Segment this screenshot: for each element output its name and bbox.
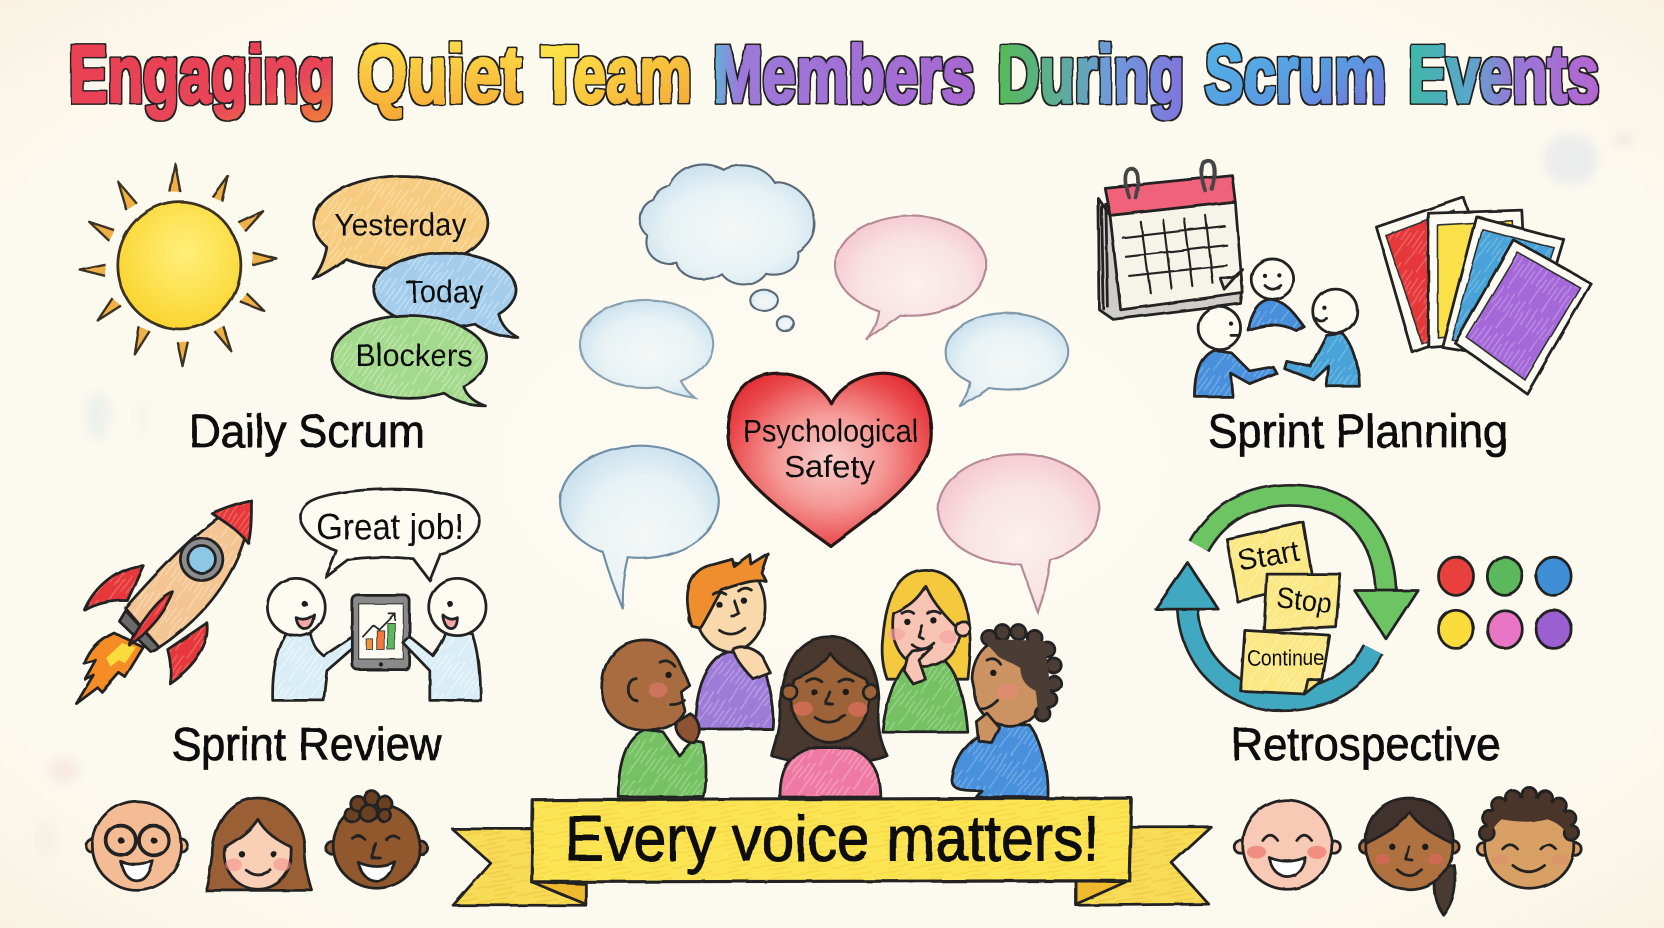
person: centre, long dark hair, pink shirt — [772, 637, 887, 797]
person: orange hair, purple shirt — [687, 554, 773, 729]
panel: daily scrum — [80, 163, 518, 457]
speech bubble: pale pink top — [836, 216, 986, 340]
person: brown skin, green shirt, profile — [602, 640, 706, 797]
title: Scrum — [1204, 30, 1386, 120]
heart: psychological safety: Safety — [784, 449, 876, 485]
figures: three people at table — [1195, 259, 1359, 397]
group of five people — [602, 554, 1061, 797]
speech bubble: today: Today — [405, 273, 484, 309]
thought cloud — [640, 164, 814, 331]
figure: right person — [403, 578, 486, 700]
speech bubble: today — [374, 253, 518, 337]
sticky note: continue: Continue — [1247, 645, 1324, 670]
icon: calendar — [1098, 160, 1243, 319]
title: Engaging — [69, 30, 334, 120]
sticky note: start — [1227, 522, 1312, 602]
face: dark skin with curly top — [326, 791, 428, 888]
title — [69, 30, 1599, 120]
panel: retrospective — [1156, 495, 1571, 770]
title: During — [998, 30, 1184, 120]
sticky note: continue — [1241, 630, 1330, 694]
person: curly hair, blue shirt, profile — [952, 625, 1061, 797]
colour dots — [1438, 557, 1571, 648]
title: Quiet — [358, 30, 522, 120]
speech bubble: great job: Great job! — [316, 506, 464, 547]
figure: left person — [267, 578, 359, 700]
sticky note: stop — [1264, 574, 1340, 630]
speech bubble: blockers: Blockers — [356, 337, 472, 373]
panel: psychological safety speech bubbles — [560, 164, 1099, 612]
speech bubble: large blue left — [560, 446, 719, 609]
sticky note: stop: Stop — [1275, 582, 1334, 621]
banner: every voice matters — [452, 798, 1211, 905]
speech bubble: large pink right — [938, 454, 1099, 612]
faces: right row — [1234, 787, 1581, 915]
icon: green cycle arrow — [1199, 495, 1418, 639]
label: sprint review: Sprint Review — [172, 718, 442, 770]
right tail — [1076, 827, 1211, 905]
title: Members — [713, 30, 974, 120]
left tail — [452, 829, 586, 905]
icon: rocket — [76, 501, 252, 704]
heart: psychological safety: Psychological — [743, 412, 918, 448]
panel: sprint planning — [1098, 160, 1591, 457]
face: curly hair, smiling — [1477, 787, 1581, 888]
speech bubble: great job — [301, 489, 479, 580]
title: Team — [541, 30, 692, 120]
banner body — [532, 798, 1131, 882]
speech bubble: pale blue left — [579, 300, 713, 398]
panel: sprint review — [76, 489, 486, 770]
icon: sun — [80, 163, 277, 366]
heart: psychological safety — [728, 373, 932, 547]
face: bald, laughing — [1234, 800, 1340, 889]
speech bubble: pale blue right — [945, 313, 1068, 406]
face: long brown hair — [206, 798, 312, 890]
label: sprint planning: Sprint Planning — [1208, 405, 1508, 457]
speech bubble: yesterday: Yesterday — [334, 207, 467, 243]
sticky note: start: Start — [1235, 535, 1303, 578]
label: retrospective: Retrospective — [1231, 718, 1501, 770]
faces: left row — [86, 791, 428, 890]
speech bubble: blockers — [332, 316, 487, 405]
icon: teal cycle arrow — [1156, 562, 1373, 701]
icon: planning poker cards — [1376, 197, 1591, 394]
face: brown skin with braid — [1359, 798, 1459, 915]
face: bald with glasses — [86, 801, 188, 890]
label: daily scrum: Daily Scrum — [189, 405, 424, 457]
banner text: Every voice matters! — [565, 804, 1099, 875]
person: blonde hair, green shirt — [882, 570, 970, 732]
speech bubble: yesterday — [313, 176, 488, 279]
icon: tablet with chart — [352, 595, 410, 670]
